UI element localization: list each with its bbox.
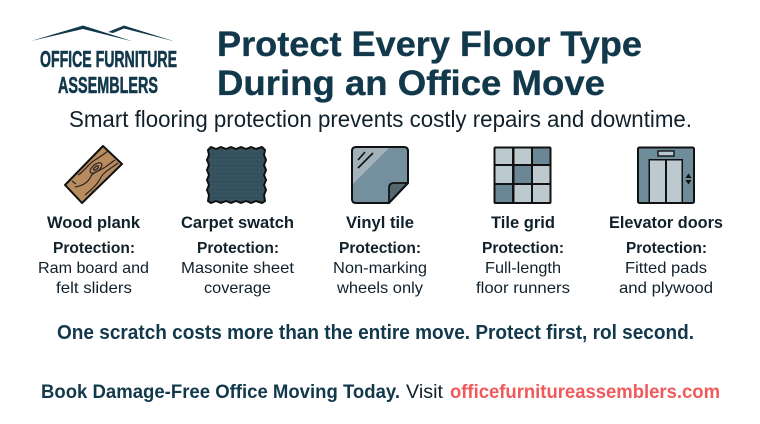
icon: carpet swatch xyxy=(207,147,266,203)
protection text: Full-length xyxy=(485,260,561,277)
call to action: officefurnitureassemblers.com xyxy=(450,381,720,403)
icon: elevator doors xyxy=(638,148,694,203)
protection text: Protection: xyxy=(339,240,421,257)
label: Elevator doors xyxy=(609,214,723,232)
title xyxy=(217,24,642,103)
protection text: floor runners xyxy=(476,280,570,297)
tagline: One scratch costs more than the entire move. Protect first, rol second. xyxy=(57,322,694,344)
protection text xyxy=(38,240,149,297)
logo name: ASSEMBLERS xyxy=(58,72,158,98)
protection text: Protection: xyxy=(53,240,135,257)
protection text: Protection: xyxy=(197,240,279,257)
protection text: Ram board and xyxy=(38,260,149,277)
protection text: wheels only xyxy=(336,280,423,297)
protection text: Masonite sheet xyxy=(181,260,295,277)
protection text: Fitted pads xyxy=(625,260,707,277)
icon: tile grid xyxy=(494,146,552,204)
panel: tile grid xyxy=(476,146,570,297)
label: Wood plank xyxy=(47,214,141,232)
call to action: Visit xyxy=(406,381,444,403)
icon: roof lines xyxy=(31,26,175,42)
panel: vinyl tile xyxy=(333,147,427,297)
call to action: Book Damage-Free Office Moving Today. xyxy=(41,381,400,403)
label: Vinyl tile xyxy=(346,214,414,232)
protection text xyxy=(619,240,713,297)
logo name xyxy=(40,46,177,98)
protection text: coverage xyxy=(204,280,271,297)
logo name: OFFICE FURNITURE xyxy=(40,46,177,72)
title: Protect Every Floor Type xyxy=(217,24,642,64)
icon: wood plank xyxy=(65,146,122,203)
subtitle: Smart flooring protection prevents costly repairs and downtime. xyxy=(69,106,692,132)
label: Carpet swatch xyxy=(181,214,294,232)
icon: vinyl tile xyxy=(352,147,408,203)
panel: elevator doors xyxy=(609,148,723,297)
panel: carpet swatch xyxy=(181,147,295,297)
logo xyxy=(31,26,177,98)
protection text: Non-marking xyxy=(333,260,427,277)
protection text xyxy=(181,240,295,297)
title: During an Office Move xyxy=(217,63,605,103)
protection text: and plywood xyxy=(619,280,713,297)
label: Tile grid xyxy=(491,214,555,232)
call to action xyxy=(41,381,720,403)
protection text: felt sliders xyxy=(56,280,132,297)
panel: wood plank xyxy=(38,146,149,297)
protection text: Protection: xyxy=(626,240,707,257)
protection text: Protection: xyxy=(482,240,564,257)
protection text xyxy=(333,240,427,297)
protection text xyxy=(476,240,570,297)
